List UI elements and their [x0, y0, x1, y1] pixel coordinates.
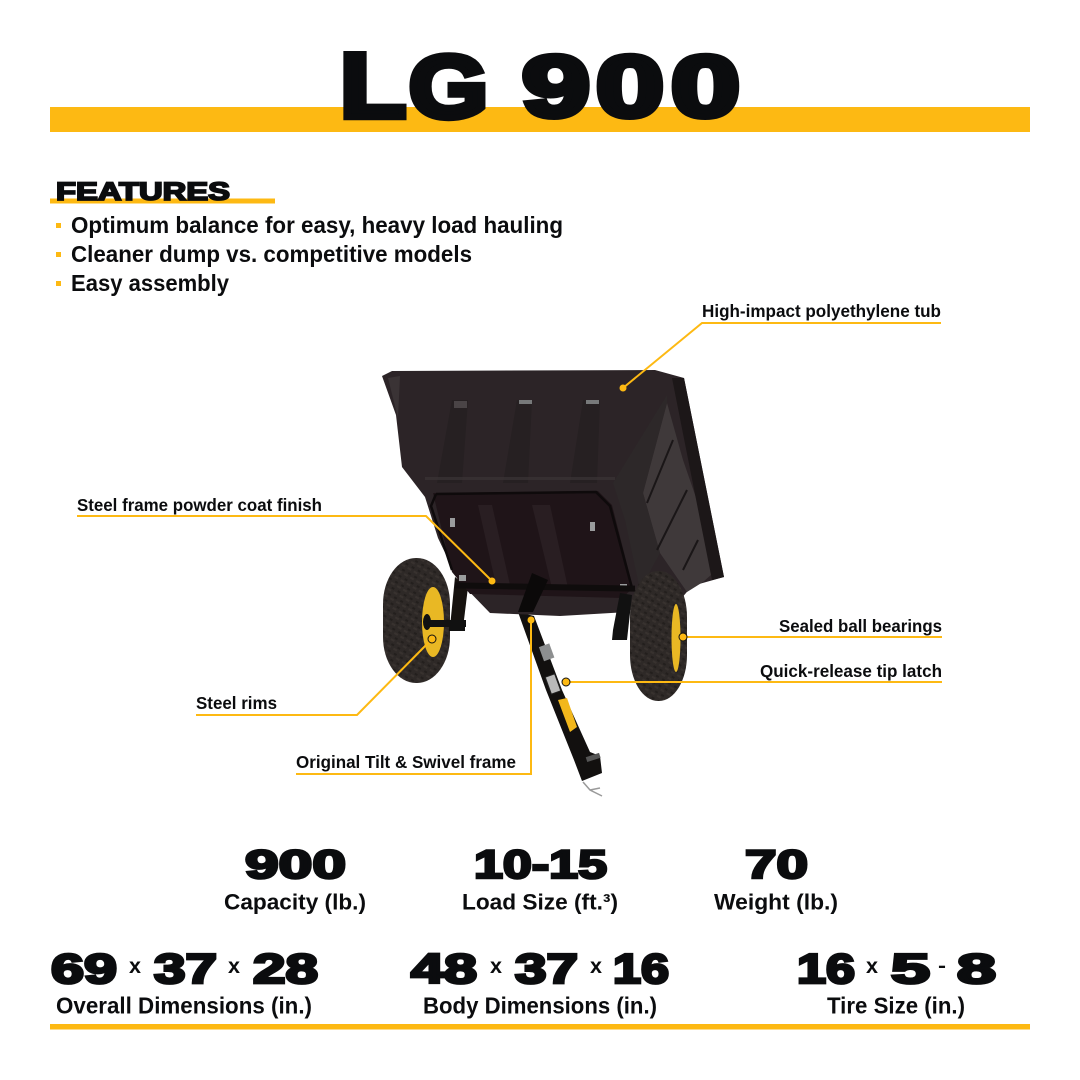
callout: sealed ball bearings [679, 616, 942, 641]
stat: overall dimensions: 28 [253, 945, 318, 992]
stat: tire size: 8 [957, 945, 996, 992]
right bracket [612, 593, 632, 640]
stat: capacity: Capacity (lb.) [224, 890, 366, 914]
stat: load size [462, 843, 618, 914]
callout: steel rims: Steel rims [196, 693, 277, 713]
stat: body dimensions: 16 [613, 945, 669, 992]
feature list: Optimum balance for easy, heavy load hauling [71, 212, 563, 238]
callout: high-impact polyethylene tub [620, 301, 941, 392]
underside frame panel [431, 491, 633, 598]
stat: weight [714, 843, 838, 914]
stat: weight: 70 [745, 843, 808, 887]
axle bar and center bracket [455, 573, 635, 612]
header: title with bar: G [409, 37, 488, 136]
stat: overall dimensions: Overall Dimensions (in.) [56, 992, 312, 1018]
callout: original tilt and swivel frame [296, 616, 534, 774]
left wheel [383, 558, 468, 683]
feature list: Cleaner dump vs. competitive models [71, 241, 472, 267]
stat: body dimensions [411, 945, 669, 1018]
stat: tire size: 16 [797, 945, 855, 992]
tub body [382, 370, 724, 640]
features section [50, 178, 563, 296]
stat: body dimensions: 48 [411, 945, 477, 992]
callout: quick-release tip latch: Quick-release tip latch [760, 661, 942, 681]
callout: original tilt and swivel frame: Original Tilt & Swivel frame [296, 752, 516, 772]
stat: body dimensions: x [590, 955, 602, 978]
stat: capacity: 900 [245, 843, 346, 887]
stat: overall dimensions [51, 945, 318, 1018]
stat: overall dimensions: x [228, 955, 240, 978]
callout: quick-release tip latch [562, 661, 942, 686]
features heading: FEATURES [56, 178, 230, 206]
callout: steel frame powder coat finish: Steel frame powder coat finish [77, 495, 322, 515]
stat: body dimensions: Body Dimensions (in.) [423, 992, 657, 1018]
tow tongue [518, 612, 602, 796]
stat: body dimensions: 37 [515, 945, 578, 992]
stat: tire size: - [938, 956, 946, 977]
stat: capacity [224, 843, 366, 914]
stat: body dimensions: x [490, 955, 502, 978]
callout: steel frame powder coat finish [77, 495, 496, 584]
stat: overall dimensions: 69 [51, 945, 117, 992]
callout: sealed ball bearings: Sealed ball bearings [779, 616, 942, 636]
header: title with bar: L [340, 36, 406, 137]
product illustration: dump cart [382, 370, 724, 796]
stat: tire size: Tire Size (in.) [827, 992, 965, 1018]
right wheel [630, 571, 687, 701]
callout: steel rims [196, 635, 436, 715]
stat: tire size [797, 945, 996, 1018]
stat: load size: 10-15 [474, 843, 607, 887]
stat: overall dimensions: 37 [154, 945, 217, 992]
header: title with bar: 0 [671, 39, 740, 135]
stat: tire size: x [866, 955, 878, 978]
features heading [50, 178, 275, 206]
footer bar [50, 1024, 1030, 1030]
stat: overall dimensions: x [129, 955, 141, 978]
stat: tire size: 5 [891, 945, 930, 992]
callout: high-impact polyethylene tub: High-impact polyethylene tub [702, 301, 941, 321]
feature list [56, 212, 563, 296]
header: title with bar [50, 36, 1030, 137]
header: title with bar: 0 [596, 39, 664, 135]
stat: weight: Weight (lb.) [714, 890, 838, 914]
feature list: Easy assembly [71, 270, 229, 296]
stat: load size: Load Size (ft.³) [462, 890, 618, 914]
header: title with bar: 9 [522, 39, 590, 135]
